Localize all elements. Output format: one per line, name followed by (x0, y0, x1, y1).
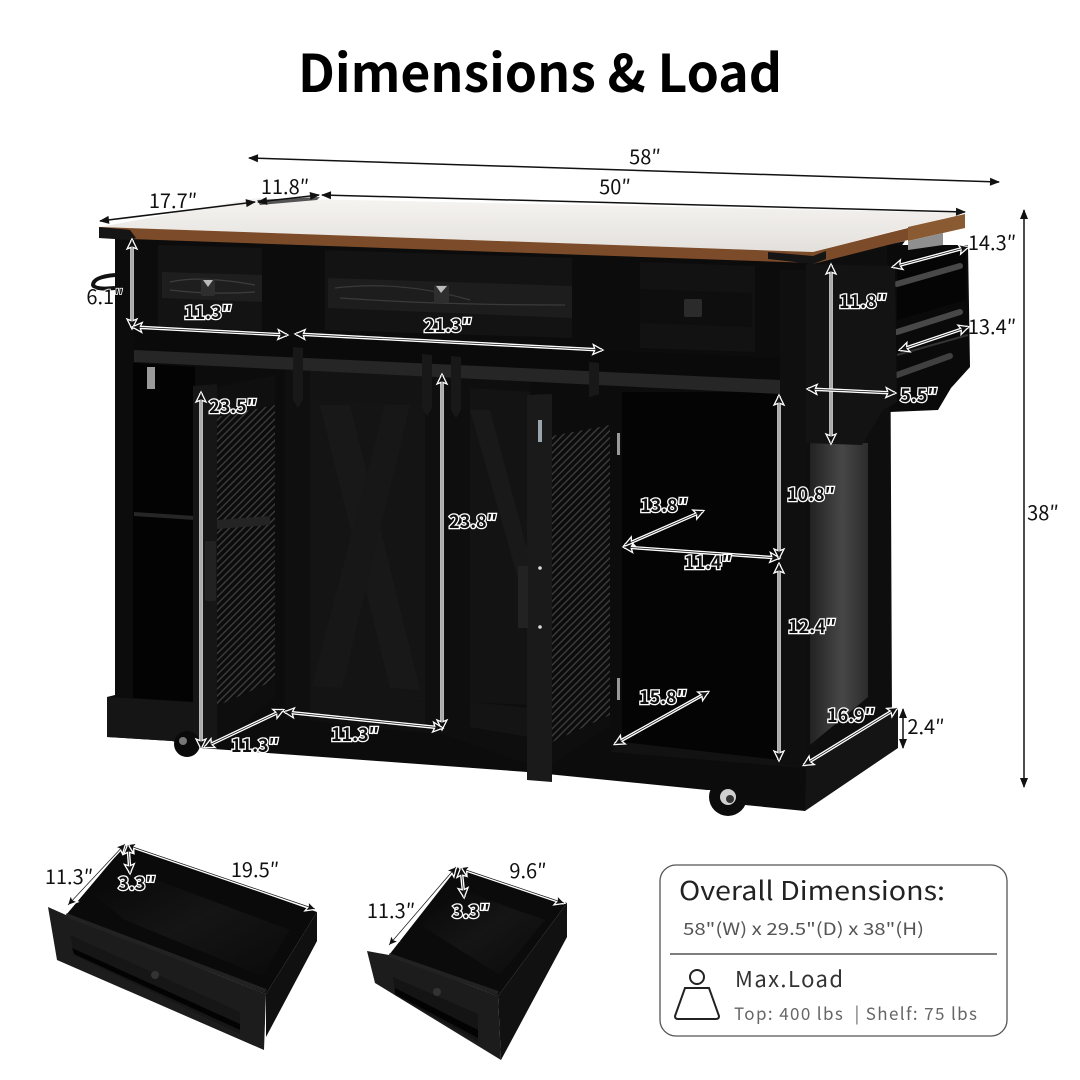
dimension labels: 6.1″ (86, 281, 124, 310)
arrow 58 inches (249, 158, 999, 182)
cabinet side panel (806, 241, 905, 770)
dimension labels (45, 141, 1059, 924)
arrow 50 inches (322, 195, 965, 212)
dimension labels: 15.8″ (639, 684, 687, 710)
left interior opening (133, 363, 195, 702)
right interior opening (610, 392, 805, 768)
dimension labels: 3.3″ (452, 898, 490, 924)
left caster wheel (174, 731, 200, 757)
dimension labels: 11.3″ (367, 895, 415, 924)
dimension labels: 17.7″ (149, 185, 197, 214)
dimension labels: 11.8″ (261, 171, 309, 200)
dimension labels: 23.8″ (449, 508, 497, 534)
dimension arrows: white outlined (68, 240, 968, 945)
side base plinth (803, 707, 898, 811)
dimension labels: 58″ (629, 141, 661, 170)
arrow 11.8 inches rack (829, 265, 833, 443)
dimension labels: 38″ (1027, 497, 1059, 526)
arrow 11.4 inches (624, 547, 779, 558)
kitchen island illustration (93, 197, 970, 816)
dimension labels: 16.9″ (827, 702, 875, 728)
dimension labels: 14.3″ (968, 227, 1016, 256)
large drawer (48, 844, 317, 1050)
load values: Top: 400 lbs | Shelf: 75 lbs (734, 1000, 977, 1025)
heading: overall dimensions: Overall Dimensions: (679, 871, 945, 908)
left open door (193, 375, 275, 748)
barn door right (445, 372, 530, 765)
max load heading: Max.Load (735, 962, 843, 994)
arrow 12.4 inches (777, 564, 781, 760)
dimension labels: 11.3″ (45, 861, 93, 890)
dimension labels: 2.4″ (907, 711, 945, 740)
arrow 11.3 inches door width (285, 712, 442, 728)
arrow 16.9 inches (804, 708, 897, 765)
small drawer arrows (389, 867, 564, 945)
arrow 13.4 inches (900, 327, 968, 350)
arrow 10.8 inches (777, 396, 781, 558)
dimension labels: 11.8″ (839, 288, 887, 314)
dimension labels: 11.3″ (331, 721, 379, 747)
wood edge (100, 227, 813, 263)
icon: weight (675, 970, 719, 1019)
middle drawer (325, 250, 572, 338)
small drawer (367, 867, 567, 1060)
title: Dimensions & Load (298, 32, 782, 107)
right caster wheel (709, 778, 747, 816)
dimension labels: 13.8″ (640, 492, 688, 518)
countertop (99, 197, 965, 264)
dimension labels: 11.4″ (684, 549, 732, 575)
arrow 11.8 inches top (258, 195, 319, 202)
overall size text: 58"(W) x 29.5"(D) x 38"(H) (683, 915, 924, 940)
arrow 5.5 inches (808, 389, 895, 393)
right spice rack (887, 245, 970, 412)
large drawer arrows (68, 844, 315, 909)
cabinet front body (107, 236, 813, 811)
dimension labels: 23.5″ (209, 393, 257, 419)
arrow 2.4 inches (902, 709, 904, 748)
dimension labels: 13.4″ (968, 311, 1016, 340)
dimension labels: 50″ (599, 171, 631, 200)
arrow 11.3 inches door depth (205, 710, 283, 747)
arrow 6.1 inches (130, 240, 134, 328)
sliding rail (134, 330, 780, 394)
dimension labels: 19.5″ (231, 854, 279, 883)
rail hangers (293, 347, 599, 418)
dimension labels: 3.3″ (118, 870, 156, 896)
front rack end panel (806, 264, 897, 445)
arrow 23.8 inches (440, 375, 444, 729)
arrow 11.3 inches drawer (133, 327, 287, 335)
right open door (518, 391, 610, 782)
arrow 13.8 inches (625, 511, 703, 545)
dimension arrows: black (100, 158, 1024, 787)
dimension labels: 21.3″ (424, 312, 472, 338)
dimension labels: 11.3″ (231, 732, 279, 758)
dimension labels: 10.8″ (787, 481, 835, 507)
arrow 23.5 inches (199, 393, 203, 748)
dimension labels: 12.4″ (788, 613, 836, 639)
panel: overall dimensions and max load (660, 865, 1007, 1036)
right drawer (640, 262, 755, 352)
dimension labels: 9.6″ (509, 855, 547, 884)
arrow 15.8 inches (615, 692, 708, 744)
arrow 14.3 inches (893, 247, 968, 267)
base front strip (107, 697, 193, 745)
arrow 17.7 inches (100, 202, 255, 221)
arrow 21.3 inches (296, 334, 602, 350)
side upright post front (780, 270, 806, 768)
barn door left (285, 364, 445, 735)
arrow 38 inches (1023, 210, 1025, 787)
drawers (158, 245, 755, 352)
dimension labels: 5.5″ (900, 382, 938, 408)
left drawer (158, 245, 262, 331)
left towel bar (93, 275, 115, 289)
bottom drawers (48, 844, 567, 1060)
dimension labels: 11.3″ (184, 299, 232, 325)
